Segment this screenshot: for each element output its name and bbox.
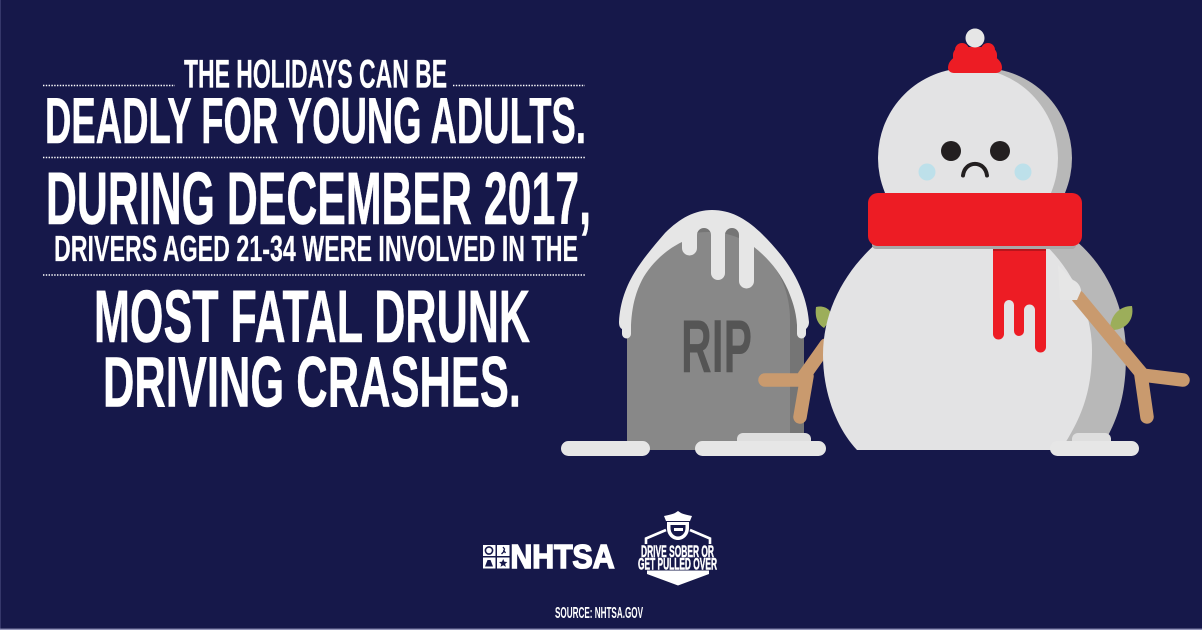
snow cap with drips [619, 210, 809, 338]
NHTSA logo [483, 538, 614, 575]
heading line: driving crashes: DRIVING CRASHES. [103, 344, 521, 422]
heading line: most fatal drunk: MOST FATAL DRUNK [94, 275, 530, 358]
tombstone shadow side [627, 226, 804, 450]
hat [948, 43, 1002, 73]
Drive Sober badge: GET PULLED OVER [638, 556, 717, 574]
heading line: the holidays can be: THE HOLIDAYS CAN BE [184, 52, 447, 96]
text line: drivers aged 21-34: DRIVERS AGED 21-34 WERE INVOLVED IN THE [54, 228, 578, 269]
scarf tail [993, 246, 1046, 352]
ground snow piles [561, 433, 1139, 456]
body back shade [1000, 240, 1126, 441]
shield point [647, 570, 709, 586]
shield shoulders [646, 530, 710, 544]
right leaf [1110, 306, 1132, 330]
snow shoulder cap [1058, 265, 1081, 300]
scarf [868, 193, 1082, 246]
left leaf [816, 307, 832, 328]
hat pompom [966, 28, 984, 48]
illustration: snowman [765, 28, 1183, 450]
illustration: tombstone [619, 210, 809, 450]
Drive Sober badge [638, 511, 717, 586]
cheeks [918, 164, 1032, 180]
tombstone face [627, 232, 790, 450]
heading line: during december 2017: DURING DECEMBER 2017, [46, 157, 591, 240]
RIP engraving: RIP [681, 304, 752, 388]
NHTSA wordmark: NHTSA [510, 538, 614, 575]
right arm [1078, 297, 1183, 417]
scarf shadow [872, 240, 1076, 249]
headline text block [43, 52, 591, 422]
badge text: DRIVE SOBER OR [641, 543, 714, 561]
officer head [667, 522, 689, 540]
head back shade [892, 68, 1072, 248]
left arm [765, 345, 826, 417]
scarf tail shadow [993, 246, 1046, 251]
frown mouth [963, 164, 987, 176]
eyes [941, 141, 1010, 161]
body [823, 240, 1092, 450]
source note: SOURCE: NHTSA.GOV [555, 605, 643, 622]
head [878, 68, 1058, 248]
heading line: deadly for young adults: DEADLY FOR YOUNG ADULTS. [45, 84, 586, 157]
officer face detail [674, 528, 683, 531]
NHTSA icon grid [483, 545, 510, 568]
officer hat [664, 511, 692, 521]
